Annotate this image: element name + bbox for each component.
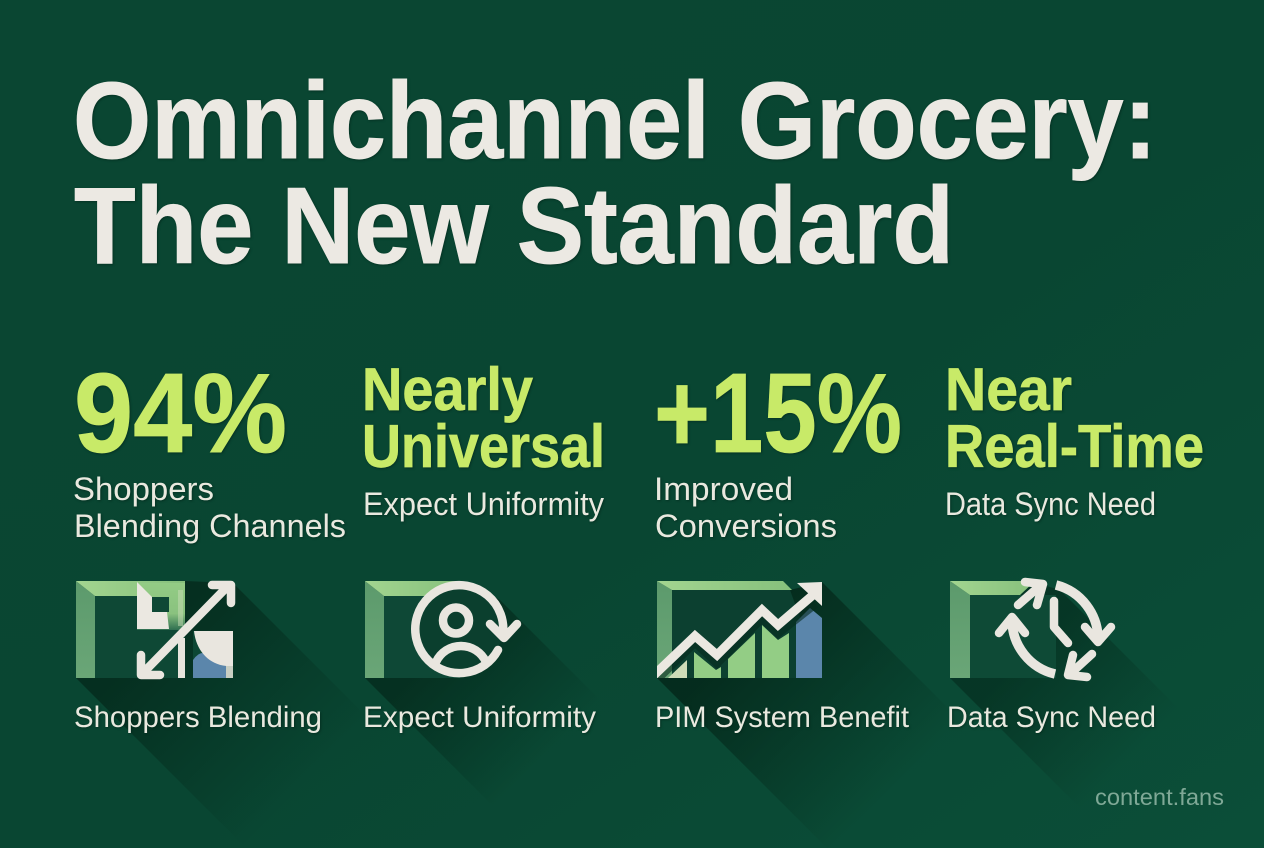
stat label: improved conversions: Conversions (655, 508, 837, 544)
watermark: content.fans (1095, 784, 1224, 810)
stat: near real-time: Near (945, 356, 1072, 423)
caption: shoppers blending: Shoppers Blending (74, 701, 322, 734)
title (73, 60, 1157, 287)
icon: expect uniformity (365, 581, 517, 678)
title: The New Standard (74, 165, 954, 287)
stat label: shoppers blending channels (73, 471, 346, 544)
stat label: improved conversions (654, 471, 837, 544)
stat: near real-time: Real-Time (945, 413, 1204, 480)
icon: data sync need (950, 581, 1111, 678)
stat label: data sync need: Data Sync Need (945, 486, 1156, 522)
stat: nearly universal (362, 356, 605, 480)
panel: expect uniformity stat (362, 356, 605, 522)
stat: near real-time (945, 356, 1204, 480)
icon: shoppers blending (76, 581, 233, 678)
stat: nearly universal: Universal (362, 413, 605, 480)
stat: +15%: +15% (654, 350, 902, 476)
stat: nearly universal: Nearly (362, 356, 534, 423)
stat label: shoppers blending channels: Blending Channels (74, 508, 346, 544)
title: Omnichannel Grocery: (73, 60, 1157, 182)
stat: 94%: 94% (74, 350, 287, 476)
caption: expect uniformity: Expect Uniformity (363, 701, 596, 734)
stat label: expect uniformity: Expect Uniformity (363, 486, 604, 522)
stat label: shoppers blending channels: Shoppers (73, 471, 214, 507)
panel: improved conversions stat (654, 350, 902, 544)
stat label: improved conversions: Improved (654, 471, 793, 507)
caption: pim system benefit: PIM System Benefit (655, 701, 910, 734)
panel: shoppers blending stat (73, 350, 346, 544)
panel: data sync stat (945, 356, 1204, 522)
icon: pim system benefit (652, 581, 822, 684)
caption: data sync need: Data Sync Need (947, 701, 1156, 734)
